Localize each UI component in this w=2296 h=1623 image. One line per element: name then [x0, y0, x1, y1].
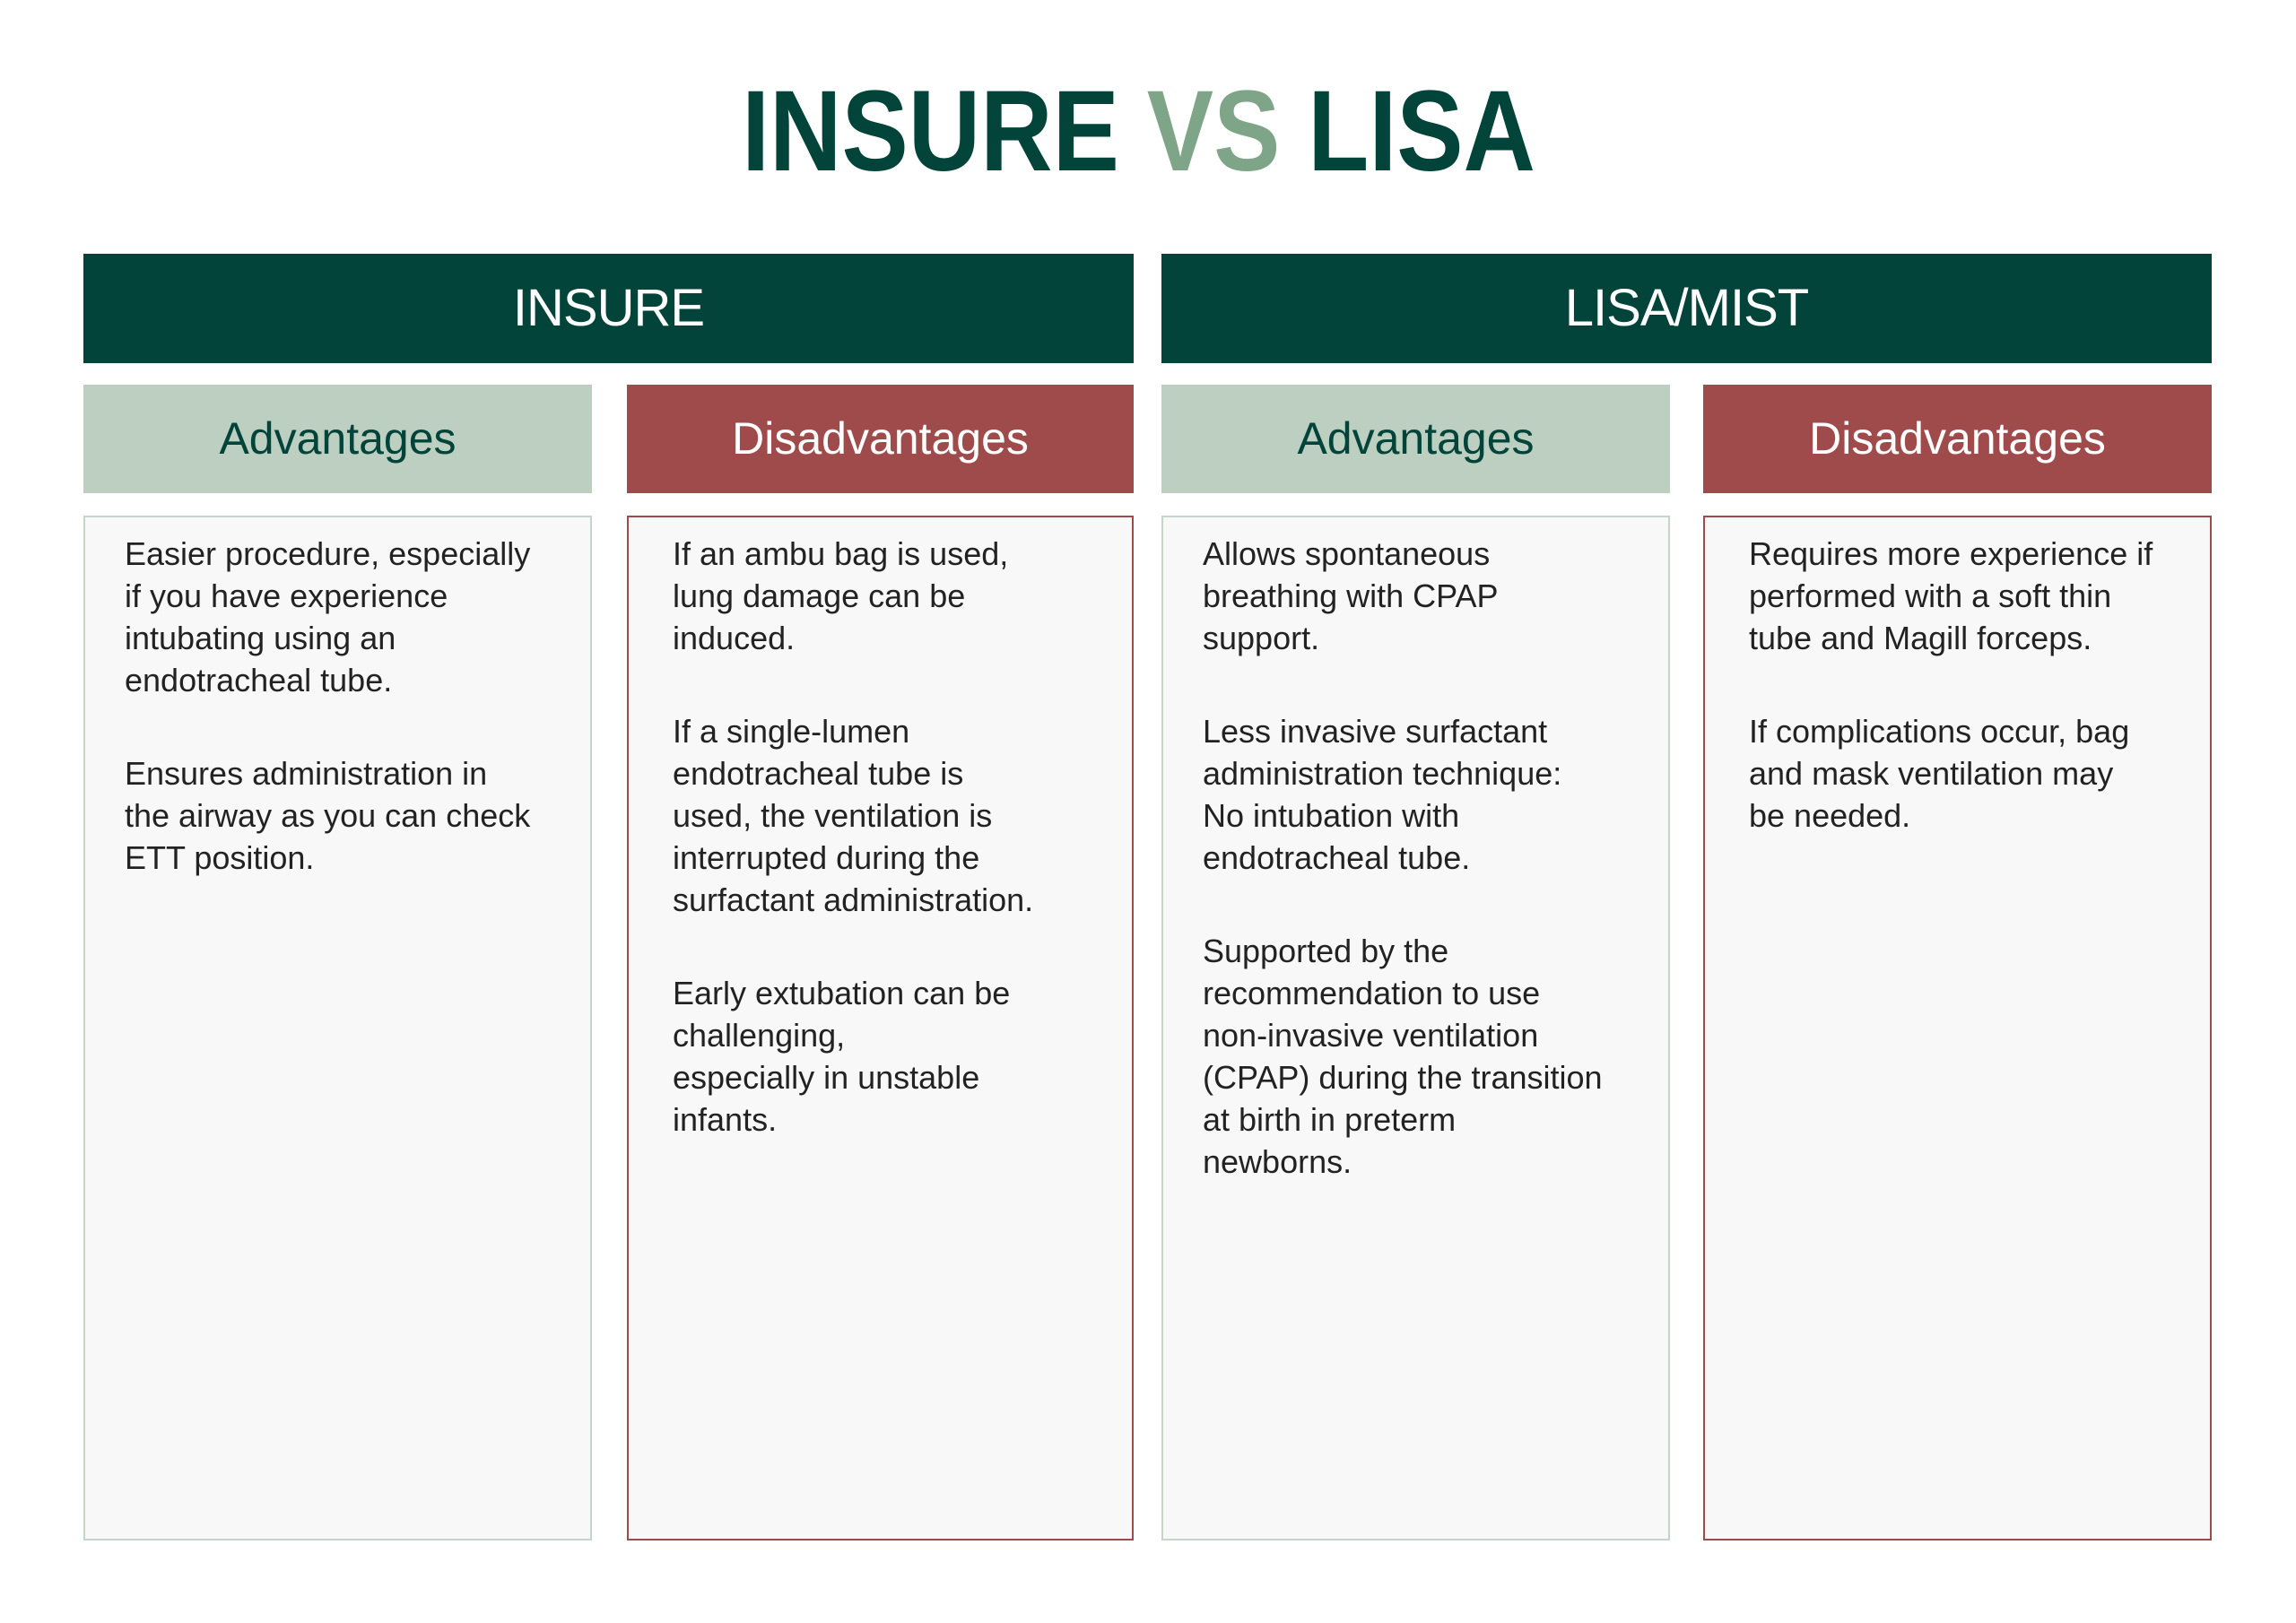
- panel: LISA disadvantages: [1703, 516, 2212, 1541]
- subheader: LISA advantages: [1161, 385, 1670, 493]
- panel: LISA advantages: recommendation to use: [1203, 975, 1540, 1011]
- panel: LISA advantages: administration technique:: [1203, 755, 1561, 792]
- panel: LISA advantages: breathing with CPAP: [1203, 577, 1499, 614]
- panel: LISA advantages: newborns.: [1203, 1143, 1352, 1180]
- panel: INSURE advantages: ETT position.: [125, 839, 314, 876]
- header: INSURE: INSURE: [513, 279, 704, 337]
- panel: INSURE advantages: endotracheal tube.: [125, 662, 392, 699]
- panel: LISA advantages: Supported by the: [1203, 933, 1448, 969]
- panel: LISA advantages: at birth in preterm: [1203, 1101, 1456, 1138]
- subheader: INSURE advantages: Advantages: [219, 413, 457, 464]
- panel: INSURE disadvantages: [627, 516, 1134, 1541]
- subheader: INSURE disadvantages: Disadvantages: [732, 413, 1029, 464]
- panel: INSURE disadvantages: especially in unstable: [673, 1059, 979, 1096]
- panel: INSURE disadvantages: lung damage can be: [673, 577, 965, 614]
- header: INSURE: [83, 254, 1134, 363]
- panel: LISA advantages: [1161, 516, 1670, 1541]
- subheader: INSURE disadvantages: [627, 385, 1134, 493]
- panel: LISA disadvantages: and mask ventilation may: [1749, 755, 2113, 792]
- panel: INSURE advantages: if you have experience: [125, 577, 448, 614]
- panel: INSURE advantages: Ensures administration in: [125, 755, 487, 792]
- panel: INSURE disadvantages: used, the ventilation is: [673, 797, 992, 834]
- panel: INSURE disadvantages: challenging,: [673, 1017, 845, 1054]
- panel: INSURE disadvantages: induced.: [673, 620, 795, 656]
- panel: INSURE disadvantages: Early extubation can be: [673, 975, 1010, 1011]
- subheader: LISA disadvantages: Disadvantages: [1809, 413, 2106, 464]
- panel: INSURE advantages: intubating using an: [125, 620, 396, 656]
- header: LISA/MIST: [1161, 254, 2212, 363]
- panel: LISA disadvantages: tube and Magill forceps.: [1749, 620, 2092, 656]
- subheader: INSURE advantages: [83, 385, 592, 493]
- panel: LISA advantages: Allows spontaneous: [1203, 535, 1490, 572]
- panel: LISA advantages: No intubation with: [1203, 797, 1459, 834]
- panel: INSURE disadvantages: interrupted during the: [673, 839, 979, 876]
- title: INSURE VS LISA: [743, 67, 1535, 195]
- panel: LISA advantages: non-invasive ventilation: [1203, 1017, 1538, 1054]
- subheader: LISA disadvantages: [1703, 385, 2212, 493]
- panel: LISA advantages: endotracheal tube.: [1203, 839, 1470, 876]
- panel: LISA advantages: Less invasive surfactant: [1203, 713, 1547, 750]
- panel: INSURE advantages: Easier procedure, especially: [125, 535, 530, 572]
- subheader: LISA advantages: Advantages: [1297, 413, 1535, 464]
- panel: INSURE disadvantages: endotracheal tube is: [673, 755, 963, 792]
- panel: INSURE disadvantages: If a single-lumen: [673, 713, 909, 750]
- panel: INSURE disadvantages: infants.: [673, 1101, 777, 1138]
- panel: LISA advantages: (CPAP) during the transition: [1203, 1059, 1603, 1096]
- panel: INSURE advantages: [83, 516, 592, 1541]
- panel: LISA disadvantages: be needed.: [1749, 797, 1910, 834]
- panel: LISA disadvantages: Requires more experience if: [1749, 535, 2152, 572]
- header: LISA/MIST: LISA/MIST: [1565, 279, 1808, 337]
- panel: INSURE advantages: the airway as you can check: [125, 797, 530, 834]
- panel: LISA disadvantages: If complications occur, bag: [1749, 713, 2129, 750]
- panel: LISA advantages: support.: [1203, 620, 1319, 656]
- panel: INSURE disadvantages: If an ambu bag is used,: [673, 535, 1008, 572]
- panel: LISA disadvantages: performed with a soft thin: [1749, 577, 2111, 614]
- panel: INSURE disadvantages: surfactant administration.: [673, 881, 1033, 918]
